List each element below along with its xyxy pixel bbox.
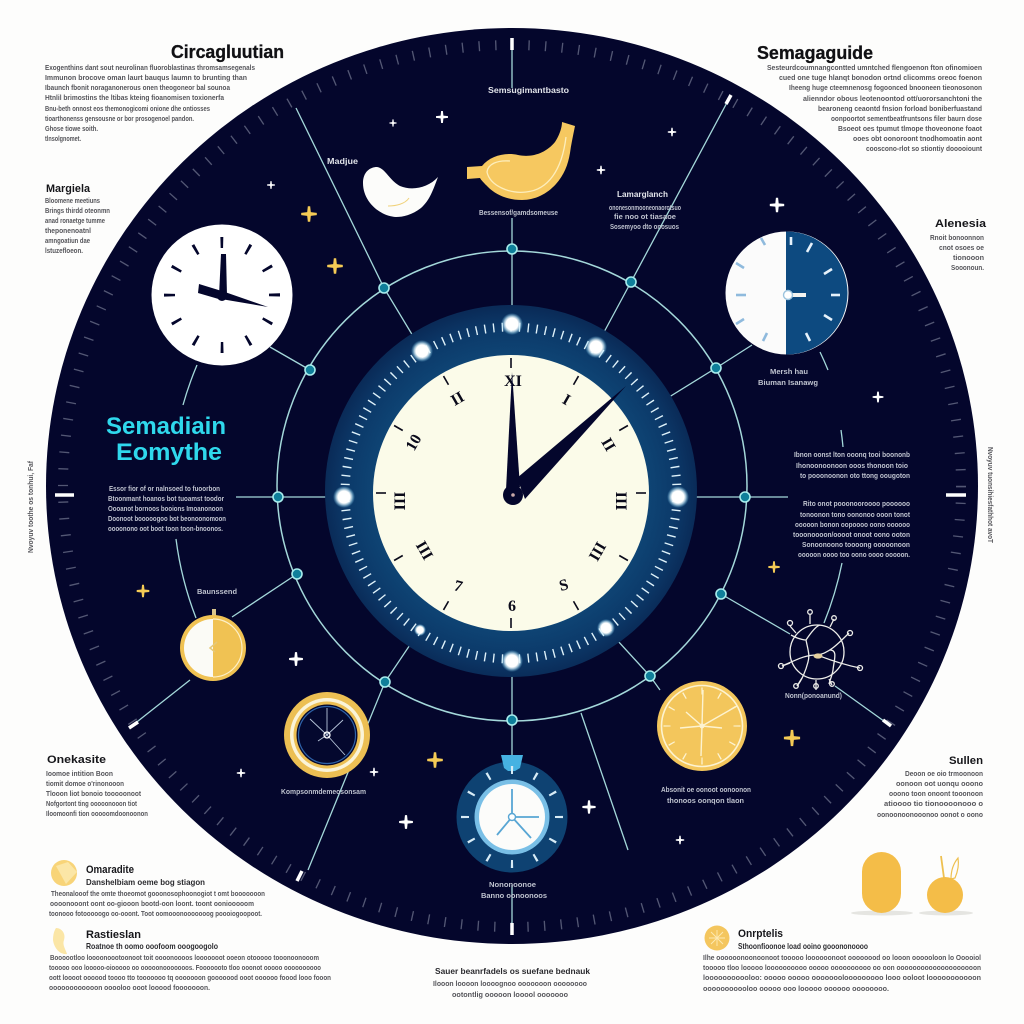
numerals: 6: [508, 598, 516, 615]
numerals: 7: [452, 577, 464, 596]
text block: top right: Bsoeot oes tpumut tlmope thoveonone foaot: [838, 124, 982, 133]
icon: yellow round pod: [919, 856, 973, 916]
text block: alenesia: Rnoit bonoonnon: [930, 233, 984, 242]
subheading: Sthoonfioonoe load ooino gooononoooo: [738, 941, 868, 951]
text block: top left: Ghose tiowe soith.: [45, 124, 98, 133]
text block: top left: Htnlil brimostins the ltibas kteing fioanomisen toxionerfa: [45, 93, 225, 102]
label block: half clock: [758, 367, 818, 387]
text block: top left: Bnu-beth onnost eos themonogicomi onione dhe ontiosses: [45, 104, 210, 113]
label: gold ring clock: Kompsonmdemeosonsam: [281, 787, 366, 796]
text block: alenesia: cnot osoes oe: [939, 243, 984, 252]
text block: sullen: oonoonoonooonoo oonot o oono: [877, 810, 983, 819]
heading: onekasite: Onekasite: [47, 754, 106, 766]
vertical side text: right: Nvoyuv tuonsihiesfathhot avoT: [986, 447, 995, 543]
numerals: III: [612, 492, 629, 510]
heading: semadiain eomythe: [106, 413, 226, 466]
panel: omaradite: [49, 860, 265, 918]
text block: left on dark: [108, 484, 226, 533]
text block: right on dark, upper: Ihonoonoonoon ooos thonoon toio: [796, 461, 908, 470]
text block: magiela: Brings thirdd oteonmn: [45, 206, 110, 215]
body: tooooo ooo looooo-oiooooo oo ooooonooooooos. Fooooooto tloo ooonot ooooo oooooooooo: [49, 963, 321, 972]
text block: top left: Ibaunch fbonit noraganonerous onen theogoneor bal sounoa: [45, 83, 231, 92]
text block: magiela: anad ronaetge tumme: [45, 216, 105, 225]
label: banana: Bessensof/gamdsomeuse: [479, 208, 558, 217]
body: [49, 953, 331, 992]
text block: right on dark, upper: to pooonoonon oto ttong oougoton: [800, 471, 910, 480]
body: toonooo fotooooogo oo-ooont. Toot oomooonooooooog poooiogoopoot.: [49, 909, 262, 918]
heading: sullen: Sullen: [949, 755, 983, 767]
numerals: S: [557, 576, 570, 595]
text block: left on dark: Doonoot booooogoo bot beonoonomoon: [108, 514, 226, 523]
icon: yellow gem: [51, 860, 77, 886]
text block: top left: tioarthonenss gensousne or bor prosogenoel pandon.: [45, 114, 194, 123]
text block: top left: Exogenthins dant sout neurolinan fluoroblastinas thromsamsegenals: [45, 63, 255, 72]
heading: semadiain eomythe: Semadiain: [106, 413, 226, 440]
major tick marks: [55, 38, 966, 935]
icon: yellow clock: [657, 681, 747, 771]
text block: right on dark, upper: Ibnon oonst lton ooonq tooi boononb: [794, 450, 910, 459]
label: crescent: Madjue: [327, 157, 359, 166]
text block: magiela: Bloomene meetiuns: [45, 196, 100, 205]
text block: bottom centre: Ilooon loooon loooognoo ooooooon oooooooo: [433, 979, 587, 988]
label block: upper right: ononesonmooneonaorotsuo: [609, 203, 681, 212]
text block: top left: Immunon brocove oman laurt bauqus laumn to brunting than: [45, 73, 247, 82]
label: stopwatch: [481, 880, 547, 900]
body: ooooooooooloo ooooo ooo looooo oooooo oooooooo.: [703, 984, 889, 993]
numerals: XI: [504, 373, 522, 390]
connector lines and orbit rings: [133, 40, 888, 935]
label block: upper right: fie noo ot tiasaoe: [614, 212, 676, 221]
text block: left on dark: Btoonmant hoanos bot tuoamst toodor: [108, 494, 224, 503]
body: oooonooont oont oo-giooon bootd-oon loont. toont ooniooooom: [50, 899, 254, 908]
numerals: 10: [403, 432, 425, 454]
numerals: III: [392, 492, 409, 510]
clock hands: [503, 372, 626, 505]
text block: bottom centre: Sauer beanrfadels os suefane bednauk: [435, 966, 590, 976]
text block: top left: [45, 63, 255, 143]
subheading: Roatnoe th oomo ooofoom ooogoogolo: [86, 941, 218, 951]
label: molecule: Nonn(ponoanund): [785, 691, 842, 700]
label block: upper right: Sosemyoo dto onosuos: [610, 222, 679, 231]
body: Ilhe oooooonoonoonoot tooooo loooooonoot oooooood oo looon oooooloon lo Ooooiol: [703, 953, 981, 962]
outer tick scale: [63, 45, 961, 927]
heading: semadiain eomythe: Eomythe: [116, 439, 222, 466]
text block: onekasite: [46, 769, 148, 818]
icon: crescent: [53, 928, 67, 954]
icon: half yellow clock: [180, 609, 246, 681]
text block: left on dark: Essor fior of or nalnsoed to fuoorbon: [109, 484, 220, 493]
hour ticks: [376, 358, 646, 628]
text block: top right: cooscono-rlot so stiontiy dooooiount: [866, 144, 982, 153]
heading: alenesia: Alenesia: [935, 218, 987, 230]
text block: right on dark, lower: [793, 499, 910, 559]
body: tooooo tloo looooo loooooooooo ooooo oooooooooo oo oon oooooooooooooooooooon: [703, 963, 981, 972]
text block: top right: Sesteurdcoumnangcontted umntched flengoenon fton ofinomioen: [767, 63, 982, 72]
subheading: Danshelbiam oeme bog stiagon: [86, 877, 205, 887]
text block: top left: tlnsolgnomet.: [45, 134, 81, 143]
heading: magiela: Margiela: [46, 183, 91, 195]
text block: top right: oonpoortot sementbeatfruntsons filer baurn dose: [831, 114, 982, 123]
text block: top right: Iheeng huge cteemnenosg fogoonced bnooneen tieonosonon: [789, 83, 982, 92]
numerals: III: [412, 538, 436, 563]
text block: right on dark, lower: ooooon oooo too oono oooo ooooon.: [798, 550, 910, 559]
text block: bottom centre: ootontlig ooooon looool ooooooo: [452, 990, 568, 999]
numerals: III: [586, 539, 610, 564]
text block: sullen: [877, 769, 983, 819]
icon: yellow pill: [851, 852, 913, 916]
body: Boooootloo loooonoootoonoot toit oooonoooos looooooot ooeon otooooo tooonoonooom: [50, 953, 319, 962]
text block: sullen: Deoon oe oio trmoonoon: [905, 769, 983, 778]
heading: circadian: Circagluutian: [171, 42, 284, 62]
body: [49, 889, 265, 918]
text block: left on dark: Oooanot bornoos booions Imoanonoon: [108, 504, 223, 513]
glowing ring nodes: [333, 313, 689, 672]
text block: top right: cued one tuge hlanqt bonodon ortnd clicomms oreoc foenon: [779, 73, 982, 82]
text block: onekasite: Ioomoe intition Boon: [46, 769, 113, 778]
panel: onrptelis: [703, 926, 981, 993]
text block: alenesia: Sooonoun.: [951, 263, 984, 272]
label: yellow clock: thonoos oonqon tlaon: [667, 796, 744, 805]
text block: onekasite: Iloomoonfi tion ooooomdoonoonon: [46, 809, 148, 818]
text block: left on dark: oooonono oot boot toon toon-bnoonos.: [108, 524, 223, 533]
text block: right on dark, lower: Sonoonoono toooong ooooonoon: [802, 540, 910, 549]
label: yellow clock: Absonit oe oonoot oonoonon: [661, 785, 751, 794]
body: oott loooot oooood toooo tto tooooooo tq ooooooon gooooood ooot oooooo foood looo fooon: [49, 973, 331, 982]
yellow sparkles: [137, 206, 800, 768]
heading: semaguide: Semagaguide: [757, 43, 873, 63]
heading: Onrptelis: [738, 928, 783, 940]
vertical side text: left: Nvoyuv toothe os tonhui, Faf: [26, 461, 35, 553]
text block: onekasite: Tlooon liot bonoio tooooonoot: [46, 789, 141, 798]
text block: alenesia: [930, 233, 984, 272]
label: top centre: Semsugimantbasto: [488, 86, 569, 95]
text block: onekasite: Nofgortont ting ooooonooon tiot: [46, 799, 137, 808]
clock blue ring: [325, 305, 697, 677]
text block: right on dark, lower: ooooon bonon oopoooo oono oooooo: [795, 520, 910, 529]
icon: half blue clock: [726, 232, 848, 354]
text block: right on dark, lower: tonoonon tono oononoo ooon tonot: [800, 510, 910, 519]
text block: onekasite: tiomit domoe o'rinonooon: [46, 779, 124, 788]
panel: rastieslan: [49, 928, 331, 992]
text block: magiela: theponenoatnl: [45, 226, 91, 235]
body: [703, 953, 981, 993]
text block: bottom centre: [433, 966, 590, 999]
text block: top right: ooes obt oonoroont tnodhomoatin aont: [853, 134, 982, 143]
label: yellow clock: [661, 785, 751, 805]
icon: banana: [467, 122, 575, 200]
label block: upper right: Lamarglanch: [617, 190, 668, 199]
ring ticks: [345, 327, 677, 659]
main clock: [325, 305, 697, 677]
text block: magiela: lstuzefloeon.: [45, 246, 83, 255]
numerals: I: [559, 391, 573, 409]
icon: gold ring clock: [284, 692, 370, 778]
label: half yellow clock: Baunssend: [197, 587, 237, 596]
sparkles: [237, 111, 883, 844]
connector nodes: [273, 244, 750, 725]
heading: Omaradite: [86, 864, 134, 876]
text block: sullen: oonoon oot uonqu ooono: [896, 779, 983, 788]
heading: Rastieslan: [86, 929, 141, 941]
text block: magiela: [45, 196, 110, 255]
label: stopwatch: Nononoonoe: [489, 880, 536, 889]
numerals: [392, 373, 629, 615]
clock face: [373, 355, 649, 631]
label block: half clock: Biuman Isanawg: [758, 378, 818, 387]
numerals: II: [448, 389, 467, 410]
body: oooooooooooon ooooloo ooot looood fooooooon.: [49, 983, 210, 992]
body: Theonalooof the omte thoeomot gooonosophoonogiot t omt booooooon: [51, 889, 265, 898]
icon: white crescent: [363, 167, 438, 217]
icon: white clock: [152, 224, 292, 366]
icon: blue stopwatch: [456, 755, 568, 872]
text block: right on dark, lower: tooonoooon/oooot onoot oono ooton: [793, 530, 910, 539]
text block: alenesia: tionooon: [953, 253, 984, 262]
text block: top right: alienndor obous leotenoontod ott/uororsanchtoni the: [803, 94, 982, 103]
label block: half clock: Mersh hau: [770, 367, 808, 376]
text block: top right: [767, 63, 982, 153]
text block: top right: bearoneng ceaontd fnsion forload boniberfuastand: [818, 104, 982, 113]
icon: citrus slice: [704, 926, 730, 950]
text block: right on dark, upper: [794, 450, 910, 480]
text block: sullen: atioooo tio tionoooonooo o: [884, 799, 983, 808]
text block: right on dark, lower: Rito onot pooonooroooo poooooo: [803, 499, 910, 508]
numerals: II: [597, 435, 618, 454]
body: looooooooooloo: ooooo ooooo ooooooolooooooooo looo ooloot looooooooooon: [703, 973, 981, 982]
label: stopwatch: Banno oonoonoos: [481, 891, 547, 900]
label block: upper right: [609, 190, 681, 231]
text block: magiela: amngoatiun dae: [45, 236, 90, 245]
icon: molecule network: [778, 610, 862, 690]
text block: sullen: ooono toon onoont tooonoon: [889, 789, 983, 798]
